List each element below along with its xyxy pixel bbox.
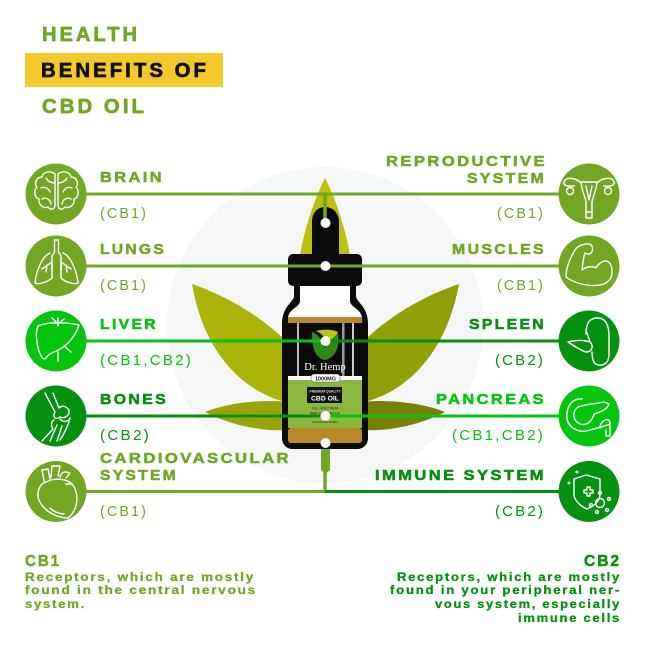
- right labels: [375, 153, 547, 520]
- CB1 note: found in the central nervous: [25, 583, 257, 597]
- item: brain: [26, 164, 86, 224]
- bottle: PREMIUM QUALITY: [310, 390, 341, 394]
- item: lungs: [26, 236, 86, 296]
- left labels: LUNGS: [100, 241, 166, 258]
- CB2 note: immune cells: [518, 611, 621, 625]
- left labels: BRAIN: [100, 169, 164, 186]
- item: reproductive: [558, 164, 620, 224]
- CB1 note: [25, 553, 257, 611]
- CB2 note: vous system, especially: [435, 597, 621, 611]
- bottle: CBD OIL: [311, 396, 339, 402]
- background circle: [167, 167, 483, 483]
- left labels: (CB1): [100, 205, 148, 222]
- bottle brand: Dr. Hemp: [304, 362, 346, 373]
- bottle: 1000MG: [315, 376, 336, 382]
- item: cardiovascular: [26, 461, 86, 522]
- item: pancreas: [558, 386, 620, 446]
- CB2 note: Receptors, which are mostly: [397, 570, 621, 584]
- left labels: (CB1,CB2): [100, 352, 193, 369]
- right labels: SYSTEM: [467, 170, 546, 187]
- item: liver: [26, 310, 86, 372]
- right labels: (CB2): [495, 503, 545, 520]
- right labels: MUSCLES: [452, 241, 546, 258]
- right labels: SPLEEN: [469, 316, 546, 333]
- cannabis leaf: [192, 178, 459, 430]
- CB2 note: CB2: [584, 553, 621, 570]
- right labels: IMMUNE SYSTEM: [375, 467, 546, 484]
- bottle: FULL SPECTRUM: [312, 406, 339, 410]
- item: spleen: [558, 310, 620, 372]
- bottle logo: [312, 330, 338, 360]
- bottle: RAW CANNABIS OIL: [310, 412, 340, 416]
- connector lines: [86, 194, 559, 492]
- right labels: PANCREAS: [436, 391, 546, 408]
- bottle: [282, 207, 368, 449]
- CB2 note: [390, 553, 621, 625]
- left labels: (CB1): [100, 503, 148, 520]
- CB1 note: Receptors, which are mostly: [25, 570, 255, 584]
- title: BENEFITS OF: [41, 60, 209, 82]
- right labels: REPRODUCTIVE: [386, 153, 547, 170]
- right labels: (CB1): [497, 205, 545, 222]
- right labels: (CB1,CB2): [452, 427, 545, 444]
- title: CBD OIL: [42, 96, 147, 118]
- dropper tip: [321, 447, 330, 474]
- left labels: [100, 169, 291, 520]
- left labels: CARDIOVASCULAR: [100, 450, 291, 467]
- CB1 note: system.: [25, 597, 86, 611]
- title: [25, 24, 223, 118]
- right labels: (CB2): [495, 352, 545, 369]
- left labels: LIVER: [100, 316, 158, 333]
- title: HEALTH: [42, 24, 140, 46]
- item: muscles: [558, 236, 620, 296]
- right labels: (CB1): [497, 277, 545, 294]
- CB1 note: CB1: [25, 553, 61, 570]
- item: bones: [26, 386, 86, 446]
- CB2 note: found in your peripheral ner-: [390, 583, 621, 597]
- left labels: (CB1): [100, 277, 148, 294]
- item: immune: [558, 461, 620, 522]
- connector dots: [320, 218, 330, 448]
- left labels: BONES: [100, 391, 168, 408]
- left labels: (CB2): [100, 427, 151, 444]
- left labels: SYSTEM: [100, 467, 178, 484]
- bottle: FOOD SUPPLEMENT: [312, 420, 338, 424]
